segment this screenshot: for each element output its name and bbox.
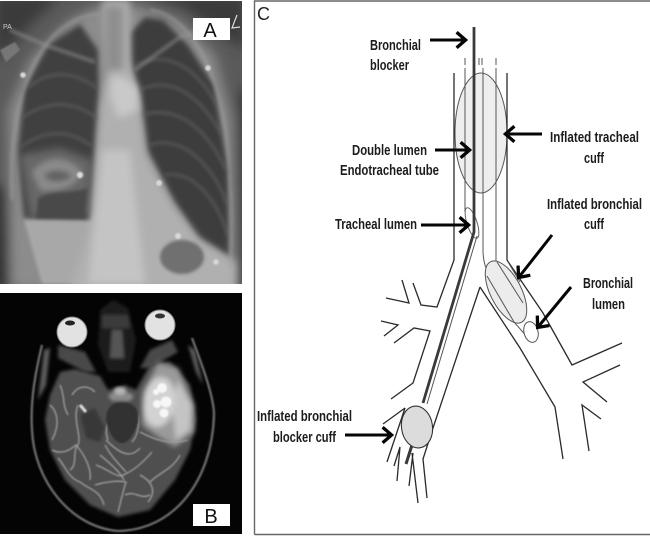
label: inflated bronchial blocker cuff: blocker cuff [273, 430, 336, 446]
label B [193, 504, 230, 528]
double lumen tube [465, 58, 496, 276]
label A [193, 18, 230, 42]
right lung [18, 24, 99, 220]
marker PA: PA [3, 24, 12, 31]
mediastinum [70, 0, 236, 290]
clavicles [8, 28, 193, 72]
label: bronchial blocker: blocker [370, 58, 409, 74]
panel B: brain MRI [0, 293, 242, 534]
left lung [130, 17, 229, 257]
aortic knob and spine [88, 6, 145, 284]
chest wall [11, 10, 231, 268]
label: tracheal lumen: Tracheal lumen [335, 217, 417, 233]
label: inflated bronchial blocker cuff: Inflated bronchial [257, 409, 352, 425]
scalp ring [32, 338, 214, 531]
label: inflated tracheal cuff: cuff [584, 151, 604, 167]
arrow: bronchial lumen [538, 287, 571, 327]
tracheal lumen [462, 206, 482, 240]
label: bronchial blocker: Bronchial [370, 38, 421, 54]
bronchial lumen [522, 320, 540, 344]
stomach bubble [160, 240, 204, 274]
arrow: inflated tracheal cuff [506, 132, 542, 136]
diaphragm and liver [24, 218, 92, 284]
inflated bronchial blocker cuff [399, 404, 435, 450]
label C: C [257, 4, 270, 24]
orbit tissue [38, 300, 203, 400]
inflated bronchial cuff [477, 255, 535, 338]
label: inflated bronchial cuff: cuff [584, 217, 604, 233]
panel C: airway diagram [254, 1, 650, 534]
soft tissue and shoulders [0, 0, 250, 290]
inflated tracheal cuff [455, 73, 507, 193]
brain [45, 362, 196, 517]
label B: B [204, 506, 218, 528]
ribs [20, 59, 228, 235]
right temporal dark region [80, 408, 105, 442]
right lung lower opacity and cavity [20, 148, 92, 219]
sulci [50, 385, 188, 512]
eyes [57, 310, 175, 347]
label: bronchial lumen: Bronchial [583, 276, 633, 292]
bright spot right [80, 405, 86, 412]
brainstem [106, 402, 138, 443]
airway walls [381, 73, 622, 503]
label: double lumen endotracheal tube: Double lumen [352, 143, 427, 159]
arrow: inflated bronchial blocker cuff [345, 434, 391, 436]
label A: A [203, 20, 217, 42]
panel A: chest X-ray [0, 0, 250, 290]
lesion [140, 362, 194, 447]
arrow: inflated bronchial cuff [519, 235, 552, 277]
label: bronchial lumen: lumen [592, 297, 625, 313]
ECG leads [20, 65, 219, 265]
arrow: tracheal lumen [421, 224, 468, 226]
bronchial blocker [406, 27, 477, 464]
arrow: double lumen tube [435, 148, 469, 152]
arrow: bronchial blocker [430, 38, 465, 42]
label: double lumen endotracheal tube: Endotracheal tube [340, 163, 439, 179]
